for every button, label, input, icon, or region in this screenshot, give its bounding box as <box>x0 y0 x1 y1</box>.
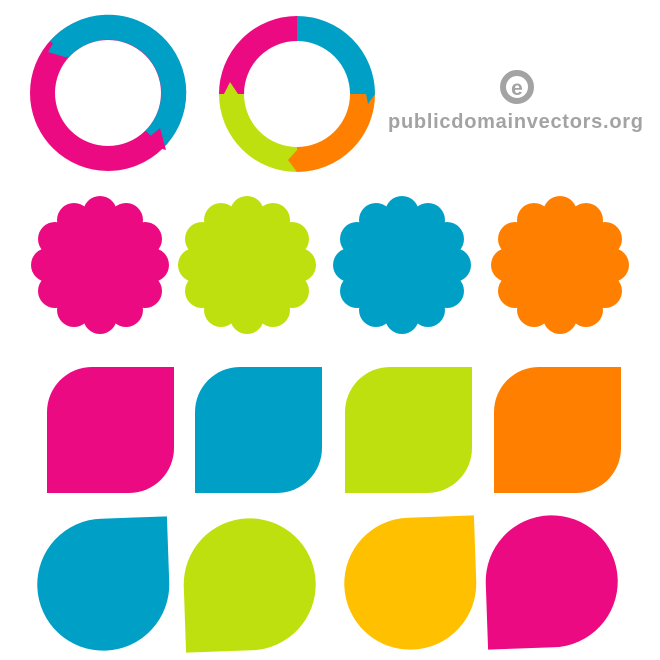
logo: public domain vectors: e <box>511 77 523 100</box>
logo: public domain vectors <box>388 73 643 133</box>
ring: four-part <box>224 16 375 172</box>
rounded squares row <box>47 367 621 493</box>
scalloped badges row <box>31 196 629 334</box>
ring: two-part pink and blue <box>42 27 174 158</box>
drop shapes row <box>35 513 620 653</box>
logo: public domain vectors: publicdomainvectors.org <box>388 111 643 133</box>
